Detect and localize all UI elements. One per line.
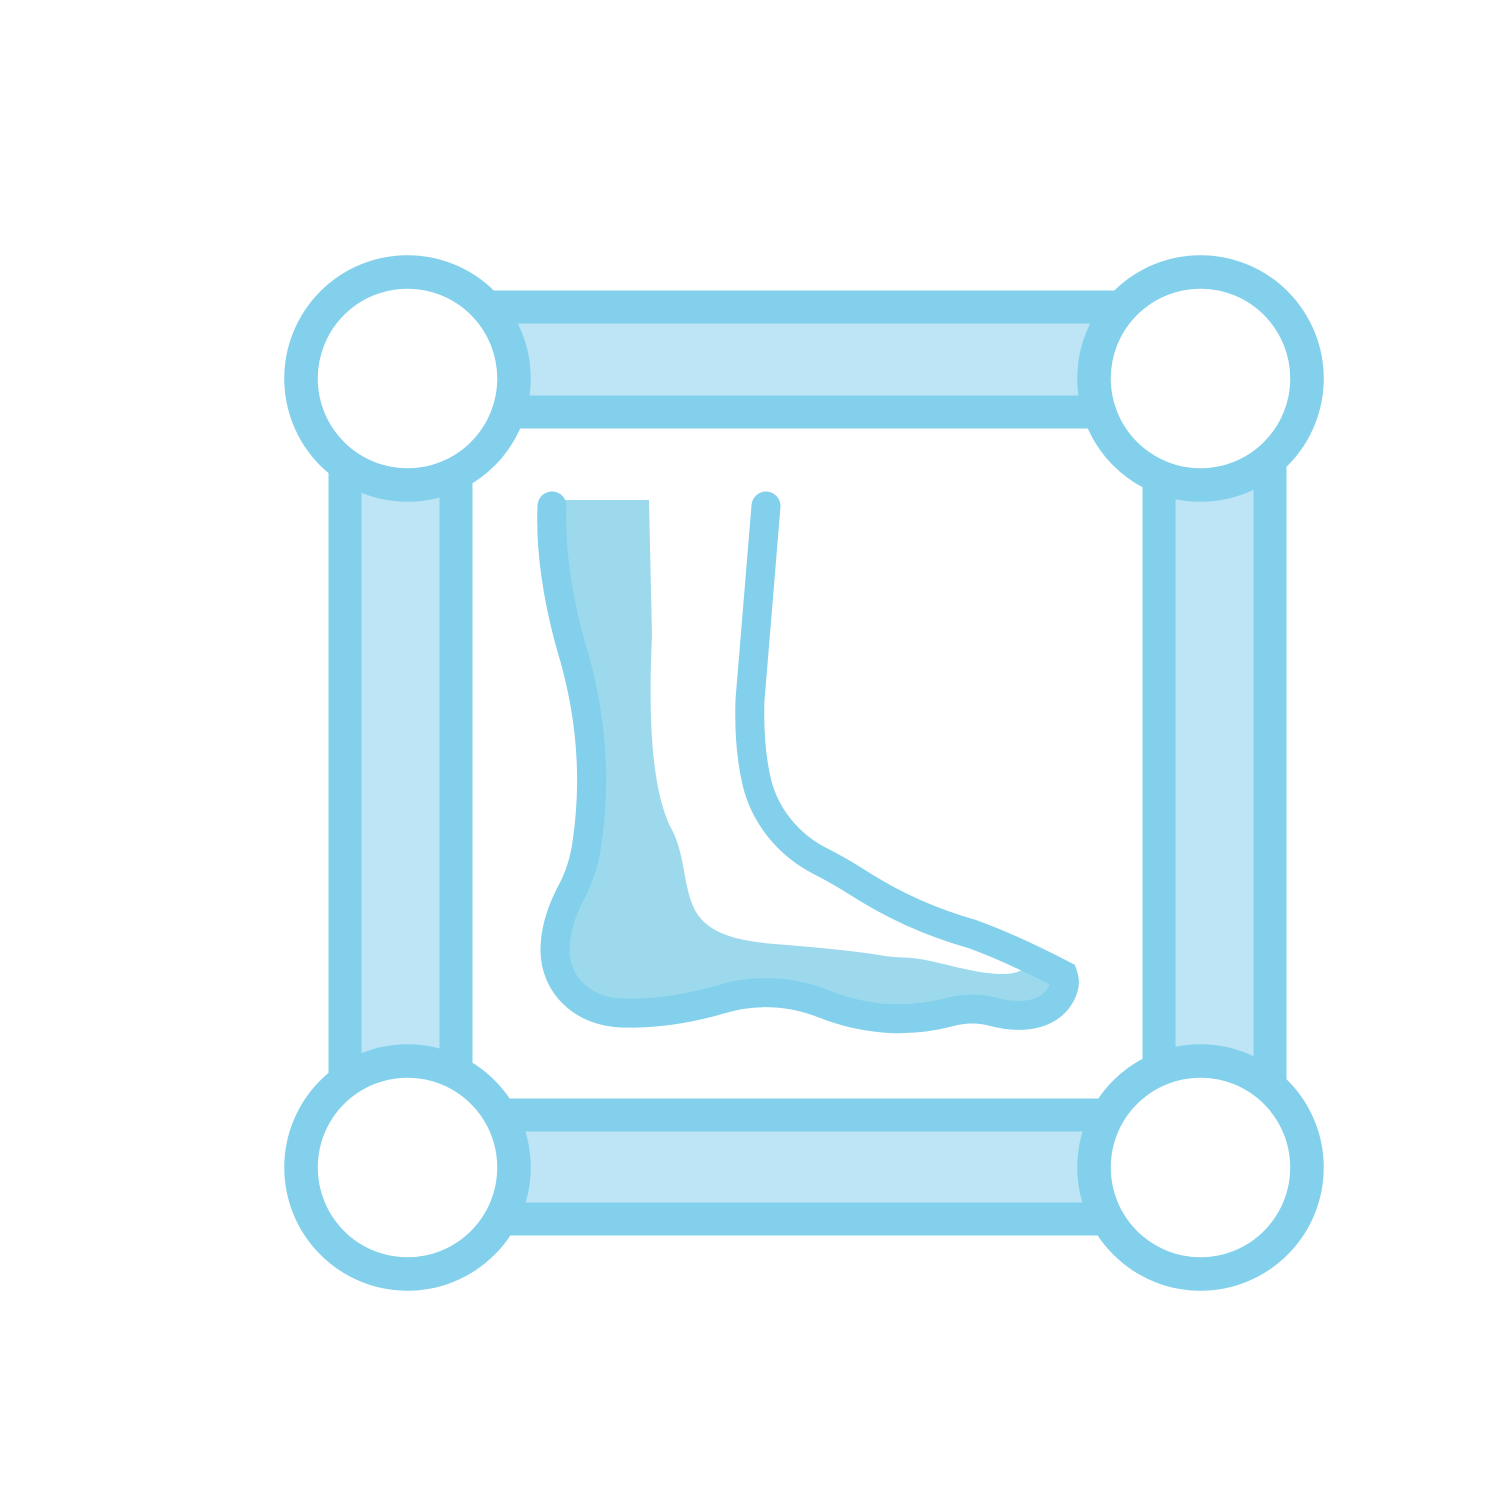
bottom-right joint [1094, 1061, 1307, 1274]
top bar [440, 307, 1160, 412]
top-left joint [301, 272, 514, 485]
left bar [345, 420, 456, 1120]
foot outline: heel and sole [552, 506, 1064, 1019]
corner joints [301, 272, 1307, 1274]
foot illustration [552, 500, 1064, 1024]
foot shaded area [555, 500, 1062, 1024]
bottom-left joint [301, 1061, 514, 1274]
right bar [1159, 420, 1270, 1120]
bottom bar [440, 1115, 1160, 1219]
frame bars [345, 307, 1270, 1219]
top-right joint [1094, 272, 1307, 485]
